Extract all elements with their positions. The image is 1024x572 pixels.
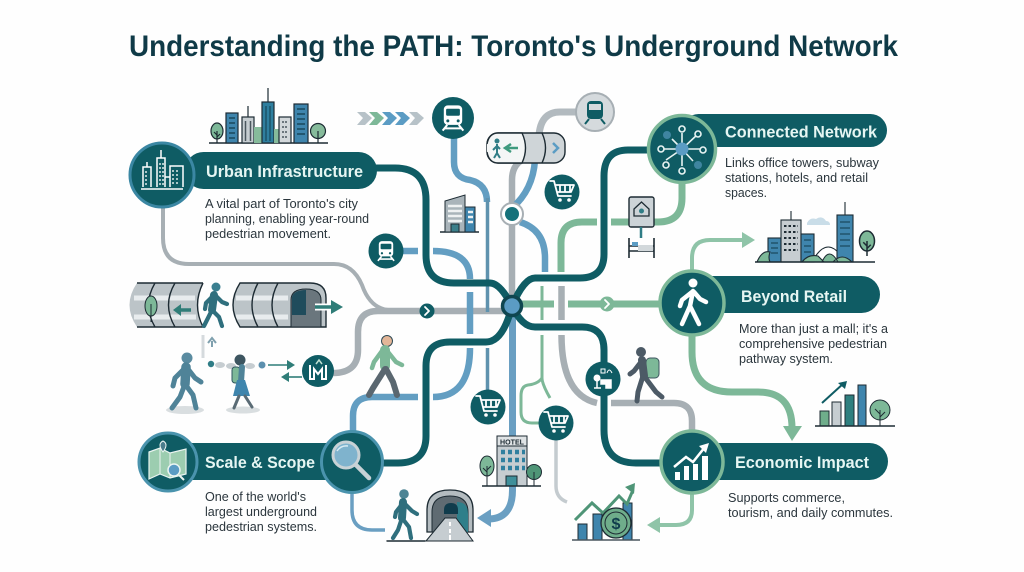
icon: tube with walker (487, 133, 565, 163)
body text: pedestrian movement. (205, 227, 331, 241)
line: blue thin vertical (486, 198, 489, 392)
body text (725, 156, 880, 200)
panel: Economic Impact (661, 431, 893, 520)
icon: tunnel entrance (426, 490, 473, 541)
pill (168, 443, 352, 480)
arrow: to right city (692, 240, 744, 272)
icon: walker (660, 271, 724, 335)
body text (739, 322, 888, 366)
heading: Beyond Retail (741, 287, 847, 306)
body text (205, 490, 317, 534)
icon: money chart (572, 483, 640, 540)
icon: tunnel left segment (130, 283, 203, 327)
arrow: blue central south (477, 509, 491, 527)
panel: Scale & Scope (139, 432, 382, 534)
icon: hotel building (480, 436, 542, 486)
icon: network nodes (648, 116, 716, 182)
line: teal urban (372, 168, 512, 306)
body text: tourism, and daily commutes. (728, 506, 893, 520)
pill (682, 114, 887, 147)
arrowhead: to right city (742, 232, 755, 248)
dotted path with arrows (203, 335, 302, 382)
line: green main east (520, 300, 665, 308)
heading: Urban Infrastructure (206, 162, 363, 181)
pill (692, 276, 880, 313)
transit network lines (163, 112, 802, 533)
line: green from Connected Network (561, 180, 682, 272)
pill (185, 152, 377, 189)
body text: One of the world's (205, 490, 306, 504)
chevron stop west (420, 304, 434, 318)
body text: Links office towers, subway (725, 156, 880, 170)
icon: train stop top right (576, 93, 614, 131)
icon: walker in tunnel (204, 282, 227, 326)
icon: hotel building: HOTEL (500, 438, 524, 446)
body text (205, 197, 369, 241)
line: thin green south branch (521, 286, 550, 423)
arrowhead: to Economic Impact (783, 426, 802, 441)
line: blue loop west upper (353, 251, 470, 432)
panel: Beyond Retail (660, 271, 888, 366)
icon: walker left (166, 352, 204, 414)
icon: money chart: $ (612, 516, 621, 533)
icon: train stop top (432, 97, 474, 139)
icon: city skyline top-left (209, 88, 328, 143)
panel: Urban Infrastructure (130, 143, 377, 241)
line: blue from top train (454, 135, 487, 202)
icon: tunnel right segment (233, 283, 343, 327)
chevrons row (357, 112, 424, 125)
arrowhead: to coin chart (647, 517, 660, 533)
icon: walker on blue line (369, 336, 402, 395)
body text: comprehensive pedestrian (739, 337, 887, 351)
icon: growth chart (661, 431, 723, 493)
line: teal south-west (380, 306, 512, 463)
pill (692, 443, 888, 480)
body text: pedestrian systems. (205, 520, 317, 534)
line: blue central north (512, 160, 545, 272)
line: teal connected (512, 150, 650, 306)
body text: Supports commerce, (728, 491, 845, 505)
body text: planning, enabling year-round (205, 212, 369, 226)
line: pale gray under cart (556, 440, 567, 502)
icon: office building (440, 195, 479, 232)
heading: Connected Network (725, 122, 878, 142)
body text: largest underground (205, 505, 317, 519)
line: magnifier to walker (352, 490, 385, 530)
panel: Connected Network (648, 114, 887, 200)
icon: train stop west (368, 234, 404, 268)
icon: small bar chart (815, 381, 895, 426)
heading: Scale & Scope (205, 453, 315, 472)
icon: city skyline right (755, 202, 875, 262)
icon: cart stop south-east (538, 406, 574, 440)
line: gray central north (512, 160, 522, 300)
icon: cart stop south-west (470, 390, 506, 424)
heading: Economic Impact (735, 453, 869, 472)
title: Understanding the PATH: Toronto's Underground Network (129, 30, 899, 63)
arrow: Economic Impact to coin chart (658, 492, 692, 525)
line: gray main west (333, 311, 505, 373)
icon: woman walker (226, 354, 260, 414)
central hub (502, 296, 522, 316)
chevron stop east (600, 296, 614, 312)
body text: More than just a mall; it's a (739, 322, 888, 336)
icon: buildings (130, 143, 194, 207)
line: gray thin from Urban Infrastructure (163, 205, 388, 310)
body text: A vital part of Toronto's city (205, 197, 359, 211)
icon: stop with stairs (302, 355, 334, 387)
icon: service stop east (586, 362, 620, 396)
interchange ring (501, 203, 523, 225)
body text: pathway system. (739, 352, 833, 366)
line: blue central south with arrow (488, 310, 512, 519)
icon: walker on baseline (387, 489, 425, 541)
body text (728, 491, 893, 520)
icon: cart stop north (544, 174, 580, 210)
body text: stations, hotels, and retail (725, 171, 868, 185)
line: teal south-east (512, 306, 664, 463)
line: gray south-east (562, 286, 692, 436)
arrow: Beyond Retail to Economic Impact (692, 334, 792, 428)
icon: magnifier (322, 432, 382, 492)
icon: walker with backpack (630, 347, 662, 401)
icon: map with pin (139, 433, 197, 491)
icon: hotel sign and bed (629, 197, 654, 258)
line: gray to top-right train (539, 112, 578, 135)
body text: spaces. (725, 186, 767, 200)
